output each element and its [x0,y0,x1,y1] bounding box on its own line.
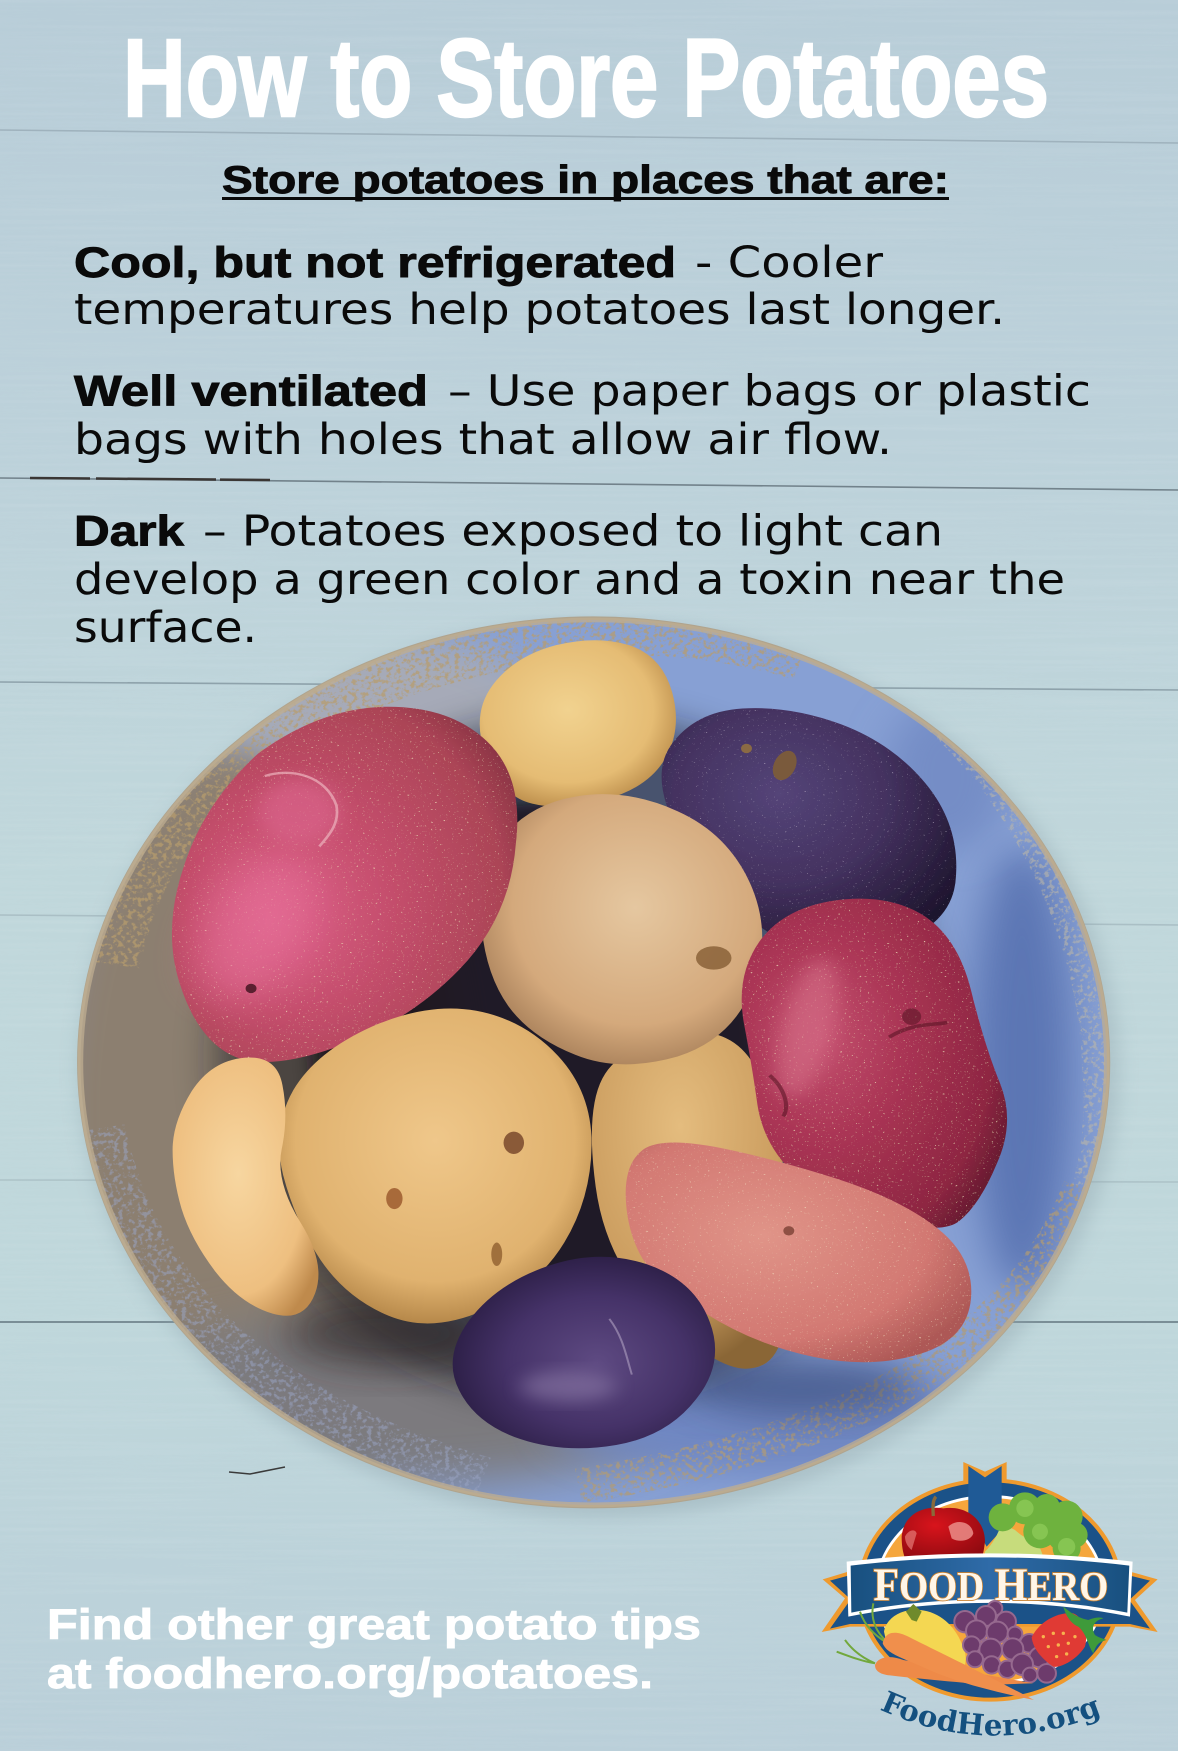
logo badge [857,1462,1123,1702]
potato: large pink [172,707,517,1062]
text block: cool: - Cooler [695,238,883,288]
logo: strawberry [1032,1607,1107,1667]
logo: broccoli [985,1492,1088,1562]
potato: big yellow [279,1008,592,1323]
text block: dark [74,506,1065,653]
logo wordmark: FOOD HERO [873,1559,1108,1611]
logo: squash [884,1604,966,1665]
logo: Food Hero [822,1462,1158,1736]
bowl of potatoes [40,600,1130,1520]
logo: apple [902,1497,985,1558]
potato: purple top [662,708,956,952]
text block: well ventilated [74,366,1091,465]
text block: dark: surface. [74,603,257,653]
logo: ribbon banner [822,1553,1158,1632]
potato: golden behind [592,1032,788,1369]
subheading: Store potatoes in places that are: [222,159,949,202]
potato: purple bottom [453,1257,715,1448]
footer text: Find other great potato tips [47,1601,701,1649]
logo: grapes [954,1601,1056,1683]
text block: well ventilated: bags with holes that allow air flow. [74,415,892,465]
potato: salmon pink [626,1143,971,1362]
text block: cool [74,238,1005,335]
text block: well ventilated: Well ventilated [74,368,428,416]
logo url: FoodHero.org [880,1690,1100,1736]
text block: dark: develop a green color and a toxin near the [74,555,1065,605]
footer text [47,1601,701,1698]
potato: small yellow [480,640,676,807]
text block: well ventilated: – Use paper bags or plastic [448,366,1091,416]
logo: carrots [837,1603,1034,1700]
text block: dark: – Potatoes exposed to light can [203,506,943,556]
bowl [40,600,1130,1520]
footer text: at foodhero.org/potatoes. [47,1650,653,1698]
potato: red right [742,899,1007,1228]
text block: cool: temperatures help potatoes last longer. [74,285,1005,335]
text block: cool: Cool, but not refrigerated [74,239,676,287]
potato: fingerling [173,1057,318,1316]
potato: tan centre [480,794,762,1064]
text block: dark: Dark [74,508,184,556]
